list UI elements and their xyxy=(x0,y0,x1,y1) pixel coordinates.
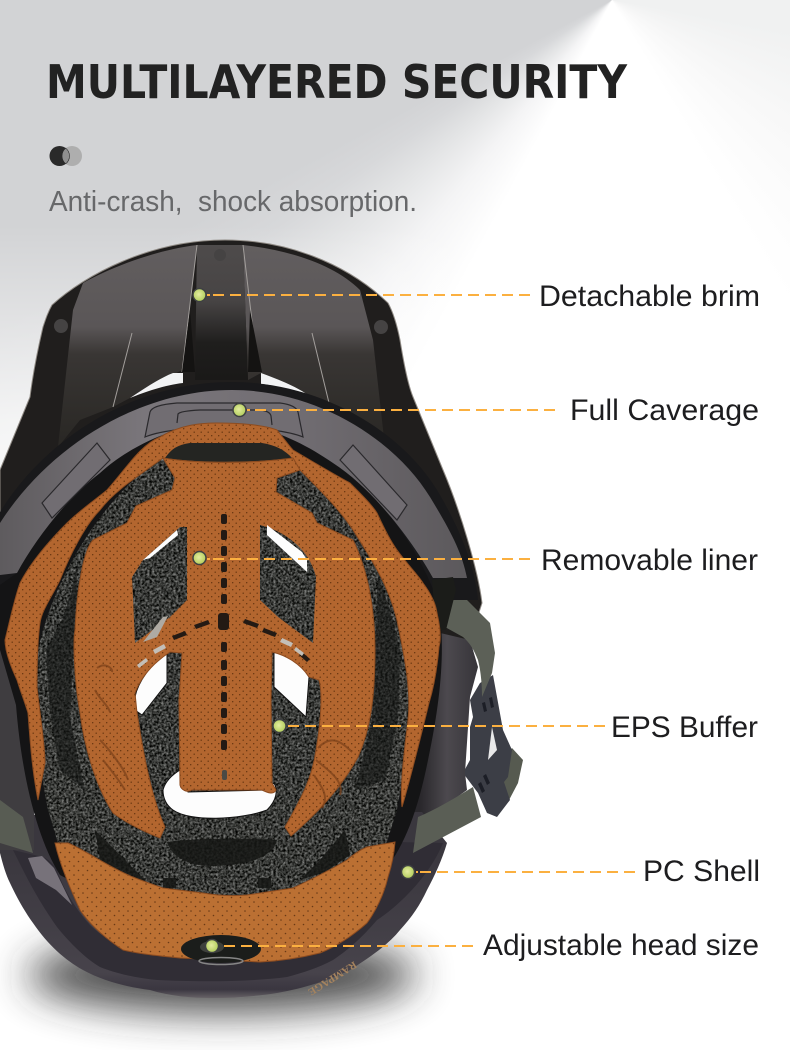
EPS foam buffer xyxy=(36,455,411,896)
EPS dark recesses xyxy=(46,560,400,888)
brim vents xyxy=(130,373,312,398)
nape pad xyxy=(55,842,395,962)
icon: overlapping circles xyxy=(50,146,82,166)
brim xyxy=(0,240,482,640)
liner top gap xyxy=(165,443,292,462)
liner slots xyxy=(172,514,310,780)
callout: PC Shell xyxy=(402,855,760,888)
gray ring band xyxy=(0,382,478,630)
callout: Detachable brim: Detachable brim xyxy=(539,280,760,313)
callout: EPS Buffer xyxy=(273,711,758,744)
brim left panel xyxy=(58,245,197,447)
callout: EPS Buffer: EPS Buffer xyxy=(611,711,758,744)
ring recess top xyxy=(145,403,303,437)
EPS windows xyxy=(132,525,316,643)
ring recess left xyxy=(42,443,110,518)
callout: Removable liner: Removable liner xyxy=(541,544,758,577)
liner center pads xyxy=(74,458,375,838)
callout: Adjustable head size xyxy=(206,929,759,962)
ring clip xyxy=(432,577,456,630)
left shell side xyxy=(0,580,34,850)
helmet shadow xyxy=(27,937,417,1013)
chin strap and buckle xyxy=(463,675,523,817)
callout: PC Shell: PC Shell xyxy=(643,855,760,888)
brand mark: RAMPAGE xyxy=(306,958,358,997)
liner outer strip xyxy=(5,423,440,807)
brim screws xyxy=(54,249,388,334)
shell corner highlight xyxy=(28,856,72,905)
callout: Removable liner xyxy=(193,544,758,577)
subtitle: Anti-crash, shock absorption. xyxy=(49,186,417,218)
white cutouts xyxy=(135,652,309,818)
title: MULTILAYERED SECURITY xyxy=(46,55,628,109)
liner embossing xyxy=(95,665,352,808)
lower shell xyxy=(0,812,447,998)
brim right panel xyxy=(243,245,385,447)
callout: Adjustable head size: Adjustable head size xyxy=(483,929,759,962)
callout: Full Caverage: Full Caverage xyxy=(570,394,759,427)
upper strap right xyxy=(443,593,495,697)
lower strap right xyxy=(413,787,481,853)
adjustment dial xyxy=(181,935,261,964)
interior dark cavity xyxy=(0,425,442,904)
callout: Full Caverage xyxy=(233,394,759,427)
helmet illustration xyxy=(0,240,523,998)
brim center panel xyxy=(195,245,248,380)
left strap xyxy=(0,800,33,853)
callout: Detachable brim xyxy=(193,280,760,313)
ring recess right xyxy=(340,445,407,520)
shell inner band xyxy=(13,842,443,981)
side block xyxy=(395,632,478,850)
